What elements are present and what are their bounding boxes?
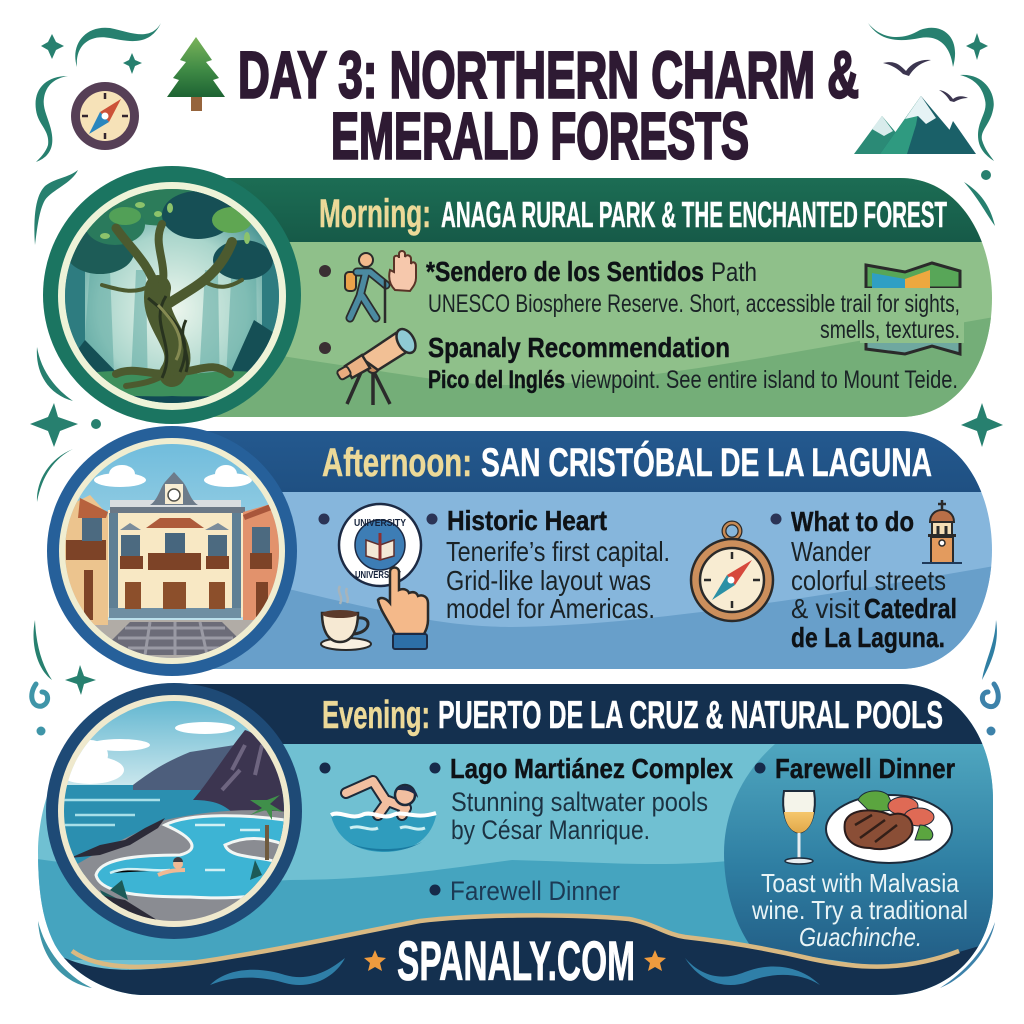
text: spanaly recommendation [428,332,958,394]
footer brand: spanaly.com [364,929,666,992]
footer wave decorations [210,958,820,985]
icon: university seal [339,504,421,586]
text: what to do: Wander [791,536,871,567]
text: spanaly recommendation: Pico del Inglés [428,366,565,394]
icon: bell tower [922,500,962,563]
text: farewell dinner heading: Farewell Dinner [775,753,955,784]
text: lago martianez complex: Lago Martiánez Complex [450,753,733,784]
text: what to do [791,506,957,653]
morning heading: Morning: [319,192,431,236]
morning heading [319,192,947,236]
icon: coffee cup [321,586,371,650]
panel: morning [43,166,1002,424]
text: farewell dinner description: Guachinche. [799,922,922,952]
afternoon panel background [172,431,1002,672]
icon: university seal: UNIVERSITY [355,570,401,581]
icon: pocket compass [691,523,773,621]
text: historic heart: Historic Heart [447,505,607,536]
icon: steak plate [826,791,952,863]
icon: birds [883,60,968,102]
icon: wine glass [783,791,815,864]
afternoon circle illustration [47,426,297,676]
text: sendero de los sentidos: *Sendero de los Sentidos [426,256,704,287]
icon: compass [71,82,139,150]
icon: hiker [345,253,386,323]
morning panel background [172,178,1002,420]
text: spanaly recommendation: Spanaly Recommendation [428,332,730,363]
title [238,38,859,172]
text: farewell dinner description: wine. Try a traditional [751,895,968,925]
text: lago martianez complex [450,753,733,845]
icon: hand [389,251,416,291]
evening heading: Evening: [322,694,430,737]
icon: university seal: UNIVERSITY [354,518,406,529]
panel: afternoon [47,426,1002,676]
text: what to do: colorful streets [791,565,946,596]
text: farewell dinner description [751,868,968,952]
bullets [319,265,331,354]
text: sendero de los sentidos: Path [711,257,757,287]
title: EMERALD FORESTS [331,98,749,172]
afternoon heading [322,439,932,485]
text: what to do: & visit [791,593,860,624]
text: historic heart: Tenerife’s first capital. [446,536,670,567]
text: farewell dinner bullet: Farewell Dinner [450,876,620,906]
text: historic heart: Grid-like layout was [446,565,651,596]
icon: mountains [854,96,976,154]
text: lago martianez complex: by César Manrique. [451,815,650,845]
icon: pointing hand [378,568,428,649]
panel: evening [30,683,1002,1004]
icon: swimmer [331,781,436,852]
text: lago martianez complex: Stunning saltwater pools [451,787,708,817]
text: what to do: de La Laguna. [791,622,945,653]
text: what to do: Catedral [864,593,957,624]
text: sendero de los sentidos: smells, textures. [820,316,960,344]
evening circle illustration [46,683,302,939]
icon: map [860,263,964,354]
bullets [318,514,782,524]
text: sendero de los sentidos [426,256,960,344]
bullets [320,762,766,896]
text: historic heart: model for Americas. [446,593,655,624]
background decorations: swirls, sparkles and dots [30,23,1003,695]
afternoon heading: Afternoon: [322,441,472,485]
icon: pine tree [167,37,225,111]
text: what to do: What to do [791,506,914,537]
footer brand: spanaly.com: SPANALY.COM [397,929,635,992]
evening panel background [30,684,1002,1004]
icon: telescope [336,326,419,405]
text: farewell dinner description: Toast with Malvasia [761,868,959,898]
morning circle illustration [43,166,301,424]
text: historic heart [446,505,670,624]
